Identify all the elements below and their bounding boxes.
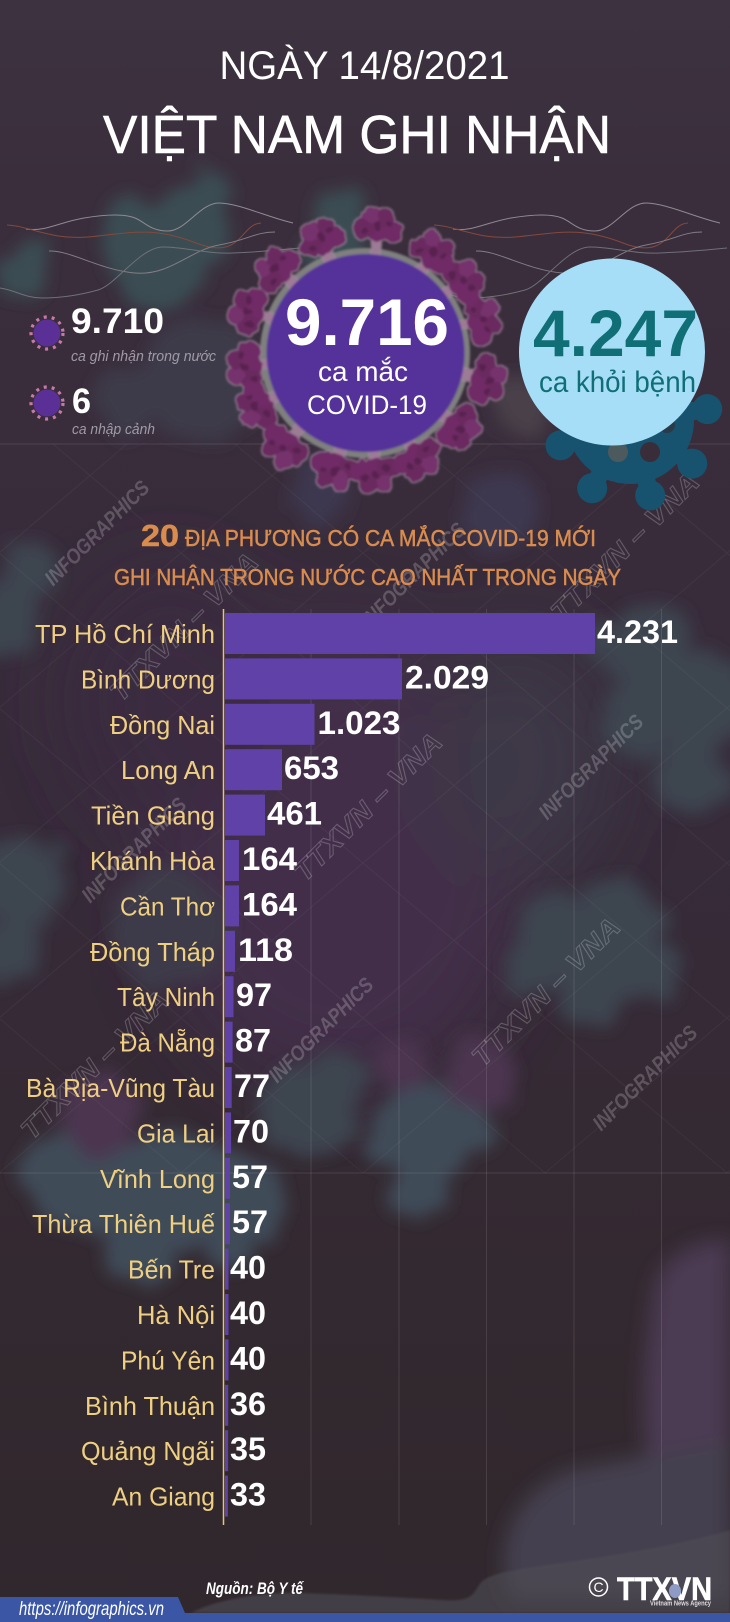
row: Quảng Ngãi: 35 (230, 1431, 266, 1467)
watermarks: TTXVN – VNA (288, 727, 448, 887)
row: Đồng Nai (110, 704, 400, 745)
row: Bình Thuận: 36 (230, 1386, 266, 1422)
row: Bến Tre: Bến Tre (128, 1255, 215, 1285)
row: Tây Ninh: 97 (236, 977, 272, 1013)
row: TP Hồ Chí Minh: TP Hồ Chí Minh (35, 619, 215, 649)
row: Bà Rịa-Vũng Tàu: 77 (234, 1068, 270, 1104)
icon: main purple coronavirus (222, 205, 511, 495)
total cases text: ca mắc (318, 356, 408, 387)
row: Vĩnh Long: 57 (232, 1159, 268, 1195)
row: Tiền Giang (91, 795, 322, 836)
row: Quảng Ngãi: Quảng Ngãi (81, 1436, 215, 1466)
row: TP Hồ Chí Minh (35, 613, 678, 654)
row: Thừa Thiên Huế (32, 1203, 268, 1244)
recovered circle: ca khỏi bệnh (539, 366, 696, 399)
row: Đồng Tháp: 118 (238, 932, 293, 968)
watermarks: INFOGRAPHICS (356, 518, 470, 632)
watermarks: TTXVN – VNA (466, 912, 626, 1072)
title: NGÀY 14/8/2021 (220, 43, 510, 88)
row: An Giang: 33 (230, 1477, 266, 1513)
recovered circle (519, 258, 705, 446)
chart heading: ĐỊA PHƯƠNG CÓ CA MẮC COVID-19 MỚI (185, 524, 596, 551)
row: Gia Lai (137, 1112, 269, 1153)
row: Long An: 653 (284, 750, 339, 786)
watermarks: INFOGRAPHICS (77, 793, 191, 907)
row: Vĩnh Long (100, 1158, 268, 1199)
recovered circle: 4.247 (533, 296, 698, 370)
icon: imported cases virus (31, 387, 63, 419)
row: Long An (121, 749, 339, 790)
watermarks: TTXVN – VNA (104, 547, 264, 707)
footer bar with url: https://infographics.vn (19, 1599, 164, 1620)
row: An Giang: An Giang (112, 1482, 215, 1512)
row: Đồng Tháp: Đồng Tháp (90, 937, 215, 967)
row: Thừa Thiên Huế: Thừa Thiên Huế (32, 1209, 216, 1239)
decorative wave lines (0, 203, 727, 298)
total cases text (285, 285, 449, 420)
row: Bình Dương: 2.029 (405, 659, 489, 695)
domestic cases stat: 9.710 (71, 302, 164, 341)
row: Phú Yên: Phú Yên (121, 1345, 215, 1375)
row: Đồng Nai: Đồng Nai (110, 710, 215, 740)
row: Bình Thuận: Bình Thuận (85, 1391, 215, 1421)
row: Tây Ninh (117, 976, 272, 1017)
background lattice and chart gridlines (0, 444, 730, 1525)
row: Bà Rịa-Vũng Tàu (26, 1067, 270, 1108)
row: Khánh Hòa (90, 840, 297, 881)
row: Đà Nẵng: Đà Nẵng (120, 1028, 215, 1058)
title: VIỆT NAM GHI NHẬN (103, 105, 611, 165)
row: Bà Rịa-Vũng Tàu: Bà Rịa-Vũng Tàu (26, 1073, 215, 1103)
row: Cần Thơ (120, 885, 297, 926)
watermarks: INFOGRAPHICS (264, 973, 378, 1087)
row: Bình Dương: Bình Dương (81, 664, 215, 694)
row: Bình Thuận (85, 1385, 266, 1426)
row: An Giang (112, 1476, 266, 1517)
watermarks (15, 467, 705, 1145)
chart axis (222, 609, 224, 1525)
row: Đồng Tháp (90, 931, 293, 972)
row: Phú Yên (121, 1339, 266, 1380)
watermarks: INFOGRAPHICS (588, 1021, 702, 1135)
source note: Nguồn: Bộ Y tế (206, 1579, 304, 1598)
watermarks: INFOGRAPHICS (40, 476, 154, 590)
row: Long An: Long An (121, 755, 215, 785)
imported cases stat: ca nhập cảnh (72, 421, 155, 438)
chart heading: 20 (141, 518, 179, 553)
icon: domestic cases virus (31, 317, 63, 349)
logo: TTXVN: C (593, 1579, 604, 1595)
row: Khánh Hòa: 164 (242, 841, 297, 877)
icon: teal virus behind recovered circle (541, 356, 724, 514)
row: Hà Nội (137, 1294, 266, 1335)
bottom cloud shape (191, 1530, 730, 1613)
watermarks: TTXVN – VNA (545, 467, 705, 627)
footer bar with url (0, 1597, 730, 1622)
row: Tiền Giang: Tiền Giang (91, 801, 215, 831)
total cases text: 9.716 (285, 285, 449, 359)
row: Quảng Ngãi (81, 1430, 266, 1471)
row: Bến Tre: 40 (230, 1250, 266, 1286)
row: Bến Tre (128, 1249, 266, 1290)
row: Đồng Nai: 1.023 (318, 705, 400, 741)
total cases text: COVID-19 (307, 390, 427, 420)
chart heading: GHI NHẬN TRONG NƯỚC CAO NHẤT TRONG NGÀY (114, 563, 621, 590)
imported cases stat (72, 382, 155, 438)
logo: TTXVN: Vietnam News Agency (650, 1600, 711, 1608)
row: TP Hồ Chí Minh: 4.231 (597, 614, 678, 650)
imported cases stat: 6 (72, 382, 91, 421)
row: Khánh Hòa: Khánh Hòa (90, 846, 216, 876)
domestic cases stat (71, 302, 216, 365)
row: Bình Dương (81, 658, 489, 699)
logo: TTXVN: TTXVN (617, 1571, 712, 1607)
domestic cases stat: ca ghi nhận trong nước (71, 348, 216, 365)
row: Đà Nẵng: 87 (235, 1023, 271, 1059)
row: Thừa Thiên Huế: 57 (232, 1204, 268, 1240)
chart heading (114, 518, 621, 590)
watermarks: TTXVN – VNA (15, 985, 175, 1145)
row: Tiền Giang: 461 (267, 796, 322, 832)
row: Gia Lai: Gia Lai (137, 1118, 215, 1148)
row: Phú Yên: 40 (230, 1340, 266, 1376)
row: Tây Ninh: Tây Ninh (117, 982, 215, 1012)
row: Cần Thơ: Cần Thơ (120, 891, 215, 921)
row: Hà Nội: Hà Nội (137, 1300, 215, 1330)
bar chart (26, 609, 678, 1525)
row: Đà Nẵng (120, 1022, 271, 1063)
row: Hà Nội: 40 (230, 1295, 266, 1331)
watermarks: INFOGRAPHICS (534, 710, 648, 824)
row: Vĩnh Long: Vĩnh Long (100, 1164, 215, 1194)
title (103, 43, 611, 165)
row: Cần Thơ: 164 (242, 886, 297, 922)
row: Gia Lai: 70 (233, 1113, 269, 1149)
